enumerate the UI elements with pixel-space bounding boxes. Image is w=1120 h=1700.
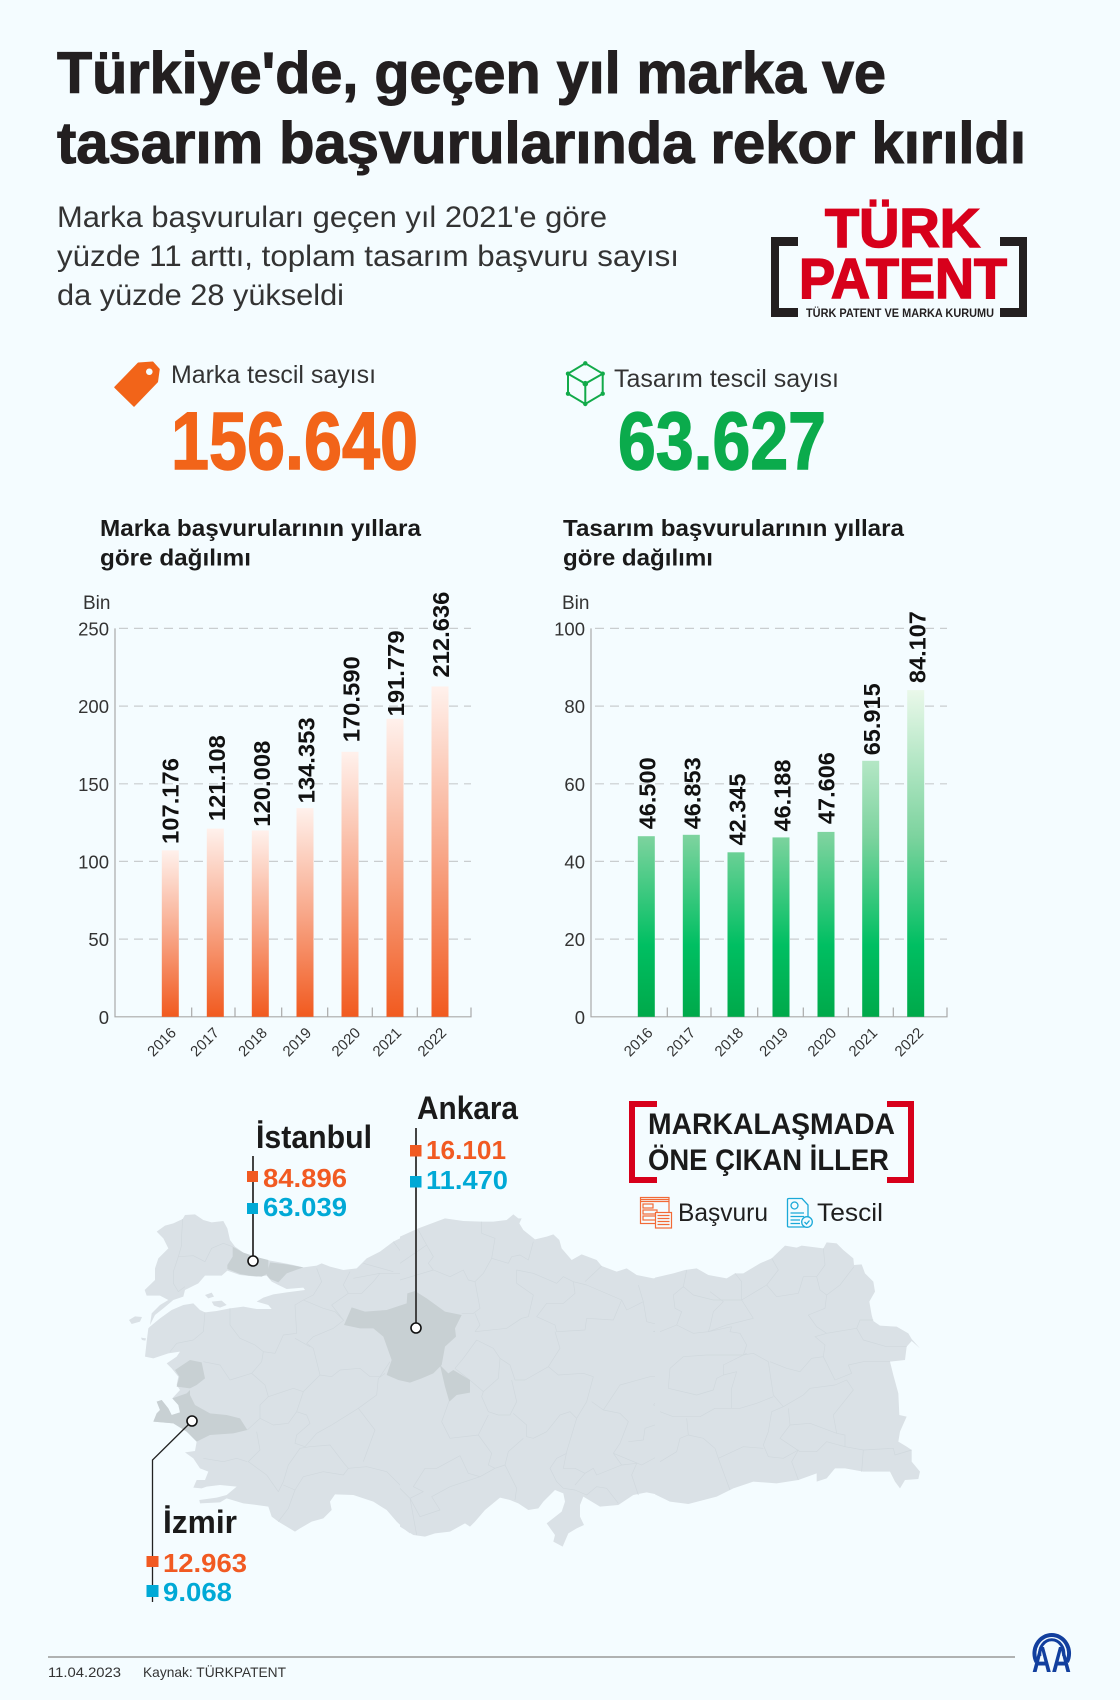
- heading: markalaşmada öne çıkan iller: ÖNE ÇIKAN İLLER: [648, 1144, 889, 1177]
- value labels: 46.188: [769, 760, 795, 832]
- y axis labels: 50: [88, 929, 109, 950]
- stat: tasarım tescil: [566, 361, 839, 487]
- value labels: 170.590: [339, 656, 365, 742]
- chart title: Tasarım başvurularının yıllara: [563, 515, 904, 541]
- value labels: 84.107: [904, 611, 930, 683]
- value labels: 212.636: [428, 592, 454, 678]
- y axis labels: 0: [99, 1007, 109, 1028]
- logo: Türk Patent: PATENT: [799, 247, 1007, 311]
- value labels: 191.779: [383, 630, 409, 716]
- callout: İstanbul: [247, 1119, 372, 1266]
- map east: [655, 1242, 920, 1504]
- value labels: 46.500: [634, 757, 660, 829]
- highlight: İstanbul: [227, 1247, 268, 1277]
- y axis labels: 100: [78, 851, 109, 872]
- icon: cube: [566, 361, 605, 406]
- callout: İzmir: 9.068: [163, 1577, 232, 1607]
- legend: Tescil: [817, 1199, 883, 1227]
- subtitle: Marka başvuruları geçen yıl 2021'e göre: [57, 201, 607, 234]
- icon: tescil: [788, 1198, 812, 1227]
- legend: Başvuru: [678, 1199, 768, 1227]
- y axis labels: 150: [78, 774, 109, 795]
- highlight: İzmir: [153, 1390, 247, 1442]
- year labels: 2021: [846, 1025, 881, 1060]
- stat: tasarım tescil: Tasarım tescil sayısı: [614, 365, 839, 393]
- stat: tasarım tescil: 63.627: [618, 396, 826, 487]
- year labels: 2020: [805, 1025, 840, 1060]
- year labels: 2016: [621, 1025, 656, 1060]
- callout: İzmir: [146, 1416, 247, 1607]
- heading: markalaşmada öne çıkan iller: [629, 1101, 914, 1183]
- title: Türkiye'de, geçen yıl marka ve: [57, 41, 886, 106]
- y axis labels: [554, 618, 585, 1028]
- chart title: göre dağılımı: [100, 544, 251, 570]
- year labels: 2022: [892, 1025, 927, 1060]
- subtitle: yüzde 11 arttı, toplam tasarım başvuru sayısı: [57, 240, 679, 273]
- year labels: 2018: [712, 1025, 747, 1060]
- footer: [48, 1657, 1015, 1680]
- chart title: [100, 515, 421, 570]
- callout: Ankara: 16.101: [426, 1135, 506, 1165]
- callout: Ankara: [410, 1090, 518, 1333]
- footer: 11.04.2023: [48, 1664, 121, 1680]
- callout: İzmir: 12.963: [163, 1548, 247, 1578]
- map centre: [400, 1214, 670, 1547]
- map: Türkiye: [129, 1214, 920, 1547]
- year labels: [621, 1025, 927, 1060]
- icon: price tag: [115, 362, 159, 406]
- logo: Türk Patent: [771, 197, 1027, 320]
- y axis labels: [78, 618, 109, 1028]
- year labels: 2022: [415, 1025, 450, 1060]
- highlight: Kocaeli: [267, 1262, 303, 1282]
- chart: marka başvuruları: [78, 515, 471, 1060]
- footer: Kaynak: TÜRKPATENT: [143, 1663, 286, 1680]
- year labels: [144, 1025, 450, 1060]
- value labels: 120.008: [249, 741, 275, 827]
- stat: marka tescil: Marka tescil sayısı: [171, 361, 376, 389]
- value labels: 47.606: [814, 752, 840, 824]
- callout: İzmir: İzmir: [163, 1504, 237, 1540]
- year labels: 2020: [329, 1025, 364, 1060]
- year labels: 2016: [144, 1025, 180, 1060]
- subtitle: da yüzde 28 yükseldi: [57, 279, 344, 312]
- value labels: 121.108: [204, 735, 230, 821]
- icon: başvuru: [640, 1198, 672, 1228]
- stat: marka tescil: [115, 361, 418, 487]
- title: tasarım başvurularında rekor kırıldı: [57, 111, 1026, 176]
- legend: [640, 1198, 883, 1228]
- chart title: Marka başvurularının yıllara: [100, 515, 421, 541]
- stat: marka tescil: 156.640: [171, 396, 418, 487]
- value labels: 42.345: [724, 774, 750, 846]
- logo: Türk Patent: TÜRK PATENT VE MARKA KURUMU: [806, 307, 994, 320]
- heading: markalaşmada öne çıkan iller: MARKALAŞMADA: [648, 1108, 895, 1141]
- y axis labels: 80: [564, 696, 585, 717]
- value labels: 134.353: [294, 717, 320, 803]
- y axis labels: 200: [78, 696, 109, 717]
- y axis unit: Bin: [562, 593, 589, 614]
- highlight: Balıkesir side: [175, 1360, 205, 1388]
- y axis labels: 60: [564, 774, 585, 795]
- callout: Ankara: Ankara: [417, 1090, 518, 1126]
- y axis unit: Bin: [83, 593, 110, 614]
- y axis labels: 0: [575, 1007, 585, 1028]
- year labels: 2017: [187, 1025, 223, 1060]
- year labels: 2019: [280, 1025, 315, 1060]
- map west: [129, 1214, 410, 1533]
- callout: İstanbul: 63.039: [263, 1192, 347, 1222]
- year labels: 2019: [756, 1025, 792, 1060]
- callout: Ankara: 11.470: [426, 1165, 508, 1195]
- bars: [162, 686, 449, 1017]
- chart: tasarım başvuruları: [554, 515, 947, 1060]
- callout: İstanbul: 84.896: [263, 1163, 347, 1193]
- value labels: 65.915: [859, 683, 885, 755]
- y axis labels: 250: [78, 618, 109, 639]
- highlight: Ankara: [344, 1291, 470, 1402]
- chart title: göre dağılımı: [563, 544, 713, 570]
- chart title: [563, 515, 904, 570]
- logo: Türk Patent: TÜRK: [825, 197, 980, 259]
- y axis labels: 20: [564, 929, 585, 950]
- year labels: 2017: [664, 1025, 699, 1060]
- y axis labels: 100: [554, 618, 585, 639]
- value labels: [634, 611, 930, 846]
- year labels: 2021: [370, 1025, 405, 1060]
- title: [57, 41, 1026, 176]
- logo: AA: AA: [1032, 1639, 1071, 1680]
- value labels: [157, 592, 454, 844]
- callout: İstanbul: İstanbul: [256, 1119, 372, 1155]
- subtitle: [57, 201, 679, 312]
- value labels: 107.176: [157, 758, 183, 844]
- y axis labels: 40: [564, 851, 585, 872]
- value labels: 46.853: [679, 757, 705, 829]
- bars: [638, 690, 924, 1017]
- year labels: 2018: [235, 1025, 271, 1060]
- logo: AA: [1032, 1635, 1071, 1680]
